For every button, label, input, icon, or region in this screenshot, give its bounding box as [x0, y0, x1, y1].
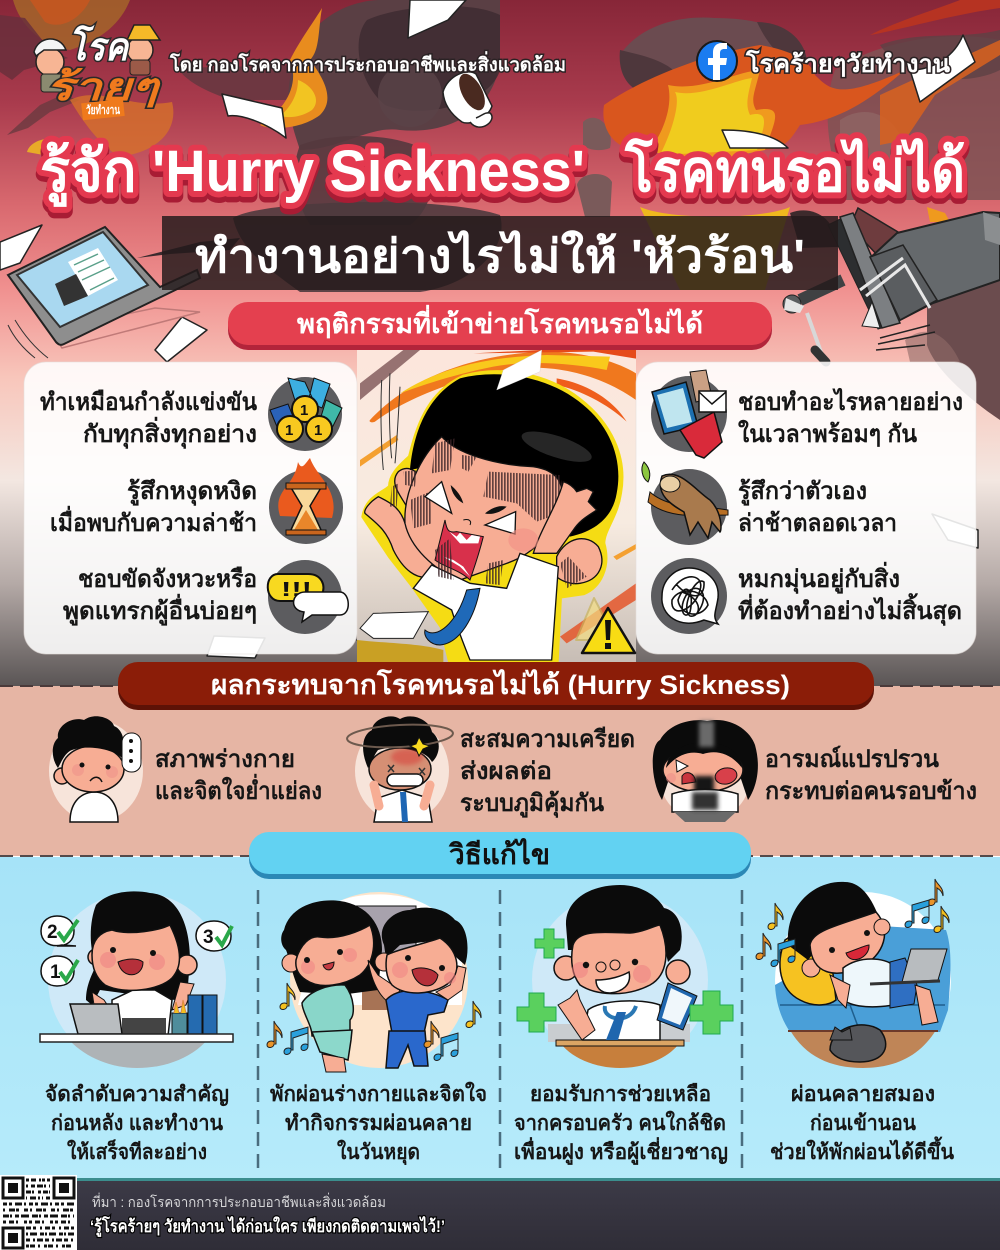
- icon: medals: 1: [300, 402, 308, 419]
- effect 2: stress and immunity: ส่งผลต่อ: [460, 758, 552, 785]
- heading pill: behaviours: พฤติกรรมที่เข้าข่ายโรคทนรอไม่ได้: [297, 304, 703, 339]
- icon: burning hourglass: [269, 458, 343, 544]
- effect 2: stress and immunity: [346, 716, 635, 822]
- icon: medals: [268, 377, 342, 451]
- effect 1: body and mind: [49, 716, 322, 822]
- background: flames and smoke: [0, 0, 1000, 420]
- panel: behaviours right: รู้สึกว่าตัวเอง: [738, 478, 867, 506]
- solution 1: prioritise: จัดลำดับความสำคัญ: [45, 1083, 229, 1107]
- title: โรคทนรอไม่ได้: [624, 141, 965, 209]
- subtitle box: ทำงานอย่างไรไม่ให้ 'หัวร้อน': [195, 229, 805, 282]
- icon: speech bubbles: !!!: [281, 579, 312, 601]
- solution 4: relax before bed: ผ่อนคลายสมอง: [791, 1083, 935, 1106]
- panel: behaviours right: ในเวลาพร้อมๆ กัน: [738, 419, 918, 448]
- effect 2: stress and immunity: สะสมความเครียด: [460, 726, 635, 753]
- effect 3: mood swings: อารมณ์แปรปรวน: [765, 745, 940, 773]
- solution 3: accept help: จากครอบครัว คนใกล้ชิด: [514, 1110, 726, 1135]
- solution 1: prioritise: ให้เสร็จทีละอย่าง: [67, 1138, 207, 1164]
- solution 3: accept help: เพื่อนฝูง หรือผู้เชี่ยวชาญ: [514, 1136, 728, 1166]
- effect 1: body and mind: สภาพร่างกาย: [155, 746, 295, 773]
- icon: medals: 1: [285, 422, 293, 439]
- footer source text: ที่มา : กองโรคจากการประกอบอาชีพและสิ่งแวดล้อม: [92, 1193, 386, 1210]
- section band: solutions: [0, 857, 1000, 1180]
- solution 2: rest: [267, 892, 487, 1166]
- title: รู้จัก 'Hurry Sickness': [40, 139, 585, 207]
- header organisation text: โดย กองโรคจากการประกอบอาชีพและสิ่งแวดล้อม: [169, 51, 566, 76]
- solution 1: prioritise: [40, 891, 233, 1164]
- solution 4: relax before bed: ก่อนเข้านอน: [810, 1111, 917, 1135]
- solution 4: relax before bed: [756, 879, 955, 1164]
- facebook page: โรคร้ายๆวัยทำงาน: [745, 49, 951, 78]
- panel: behaviours right: ชอบทำอะไรหลายอย่าง: [738, 387, 963, 416]
- icon: sloth: [642, 462, 728, 545]
- footer bar: [0, 1178, 1000, 1250]
- solution 1: prioritise: 2: [47, 922, 58, 943]
- solution 1: prioritise: 1: [50, 962, 61, 983]
- solution 2: rest: ในวันหยุด: [337, 1139, 420, 1166]
- solution 2: rest: ทำกิจกรรมผ่อนคลาย: [285, 1112, 472, 1135]
- panel: behaviours left: ทำเหมือนกำลังแข่งขัน: [40, 389, 258, 416]
- illustration: office chair: [783, 208, 1000, 362]
- panel: behaviours left: กับทุกสิ่งทุกอย่าง: [83, 416, 257, 450]
- heading pill: solutions: วิธีแก้ไข: [448, 838, 550, 870]
- solution 2: rest: พักผ่อนร่างกายและจิตใจ: [270, 1081, 487, 1106]
- solution 1: prioritise: 3: [203, 927, 214, 948]
- panel: behaviours right: [636, 362, 976, 654]
- solution 3: accept help: ยอมรับการช่วยเหลือ: [530, 1082, 711, 1106]
- effect 1: body and mind: และจิตใจย่ำแย่ลง: [155, 773, 322, 805]
- illustration: flying laptop: [8, 227, 200, 358]
- QR code: [0, 1175, 77, 1250]
- effect 3: mood swings: [653, 720, 977, 822]
- title: [40, 136, 965, 212]
- heading pill: solutions: [249, 832, 751, 879]
- effect 3: mood swings: กระทบต่อคนรอบข้าง: [765, 778, 977, 805]
- icon: multitasking items: [651, 370, 727, 458]
- icon: medals: 1: [314, 422, 322, 439]
- icon: tangled thought: [651, 558, 727, 634]
- header logo: โรค: [68, 24, 129, 69]
- panel: behaviours right: หมกมุ่นอยู่กับสิ่ง: [738, 561, 900, 595]
- facebook page: [697, 41, 951, 81]
- background: hero gradient: [0, 0, 1000, 686]
- panel: behaviours left: พูดแทรกผู้อื่นบ่อยๆ: [63, 593, 257, 626]
- subtitle box: [162, 216, 838, 290]
- solution 3: accept help: [514, 885, 733, 1166]
- solution 1: prioritise: ก่อนหลัง และทำงาน: [51, 1112, 224, 1135]
- header logo: ร้ายๆ: [46, 67, 161, 109]
- panel: behaviours right: ที่ต้องทำอย่างไม่สิ้นสุด: [738, 592, 962, 627]
- panel: behaviours right: ล่าช้าตลอดเวลา: [738, 510, 897, 537]
- title: โรคทนรอไม่ได้: [624, 136, 965, 204]
- footer source text: ‘รู้โรคร้ายๆ วัยทำงาน ได้ก่อนใคร เพียงกดติดตามเพจไว้!’: [90, 1216, 445, 1238]
- header logo: [34, 24, 161, 120]
- header logo: วัยทำงาน: [86, 103, 121, 117]
- heading pill: effects: [118, 662, 874, 710]
- icon: warning sign: [576, 598, 635, 653]
- panel: behaviours left: เมื่อพบกับความล่าช้า: [50, 505, 257, 537]
- icon: speech bubbles: [268, 560, 348, 634]
- solution 4: relax before bed: ช่วยให้พักผ่อนได้ดีขึ้น: [770, 1136, 955, 1164]
- heading pill: behaviours: [228, 302, 772, 350]
- section band: effects: [0, 686, 1000, 856]
- illustration: flying paper sheets: [0, 0, 978, 658]
- panel: behaviours left: รู้สึกหงุดหงิด: [127, 478, 257, 507]
- heading pill: effects: ผลกระทบจากโรคทนรอไม่ได้ (Hurry Sickness): [211, 668, 790, 700]
- panel: behaviours left: ชอบขัดจังหวะหรือ: [78, 566, 257, 593]
- title: รู้จัก 'Hurry Sickness': [40, 144, 585, 212]
- panel: behaviours left: [24, 362, 357, 654]
- footer source text: [90, 1193, 445, 1238]
- illustration: stressed character: [357, 350, 636, 665]
- effect 2: stress and immunity: ระบบภูมิคุ้มกัน: [460, 790, 605, 819]
- illustration: coffee cup: [443, 70, 492, 127]
